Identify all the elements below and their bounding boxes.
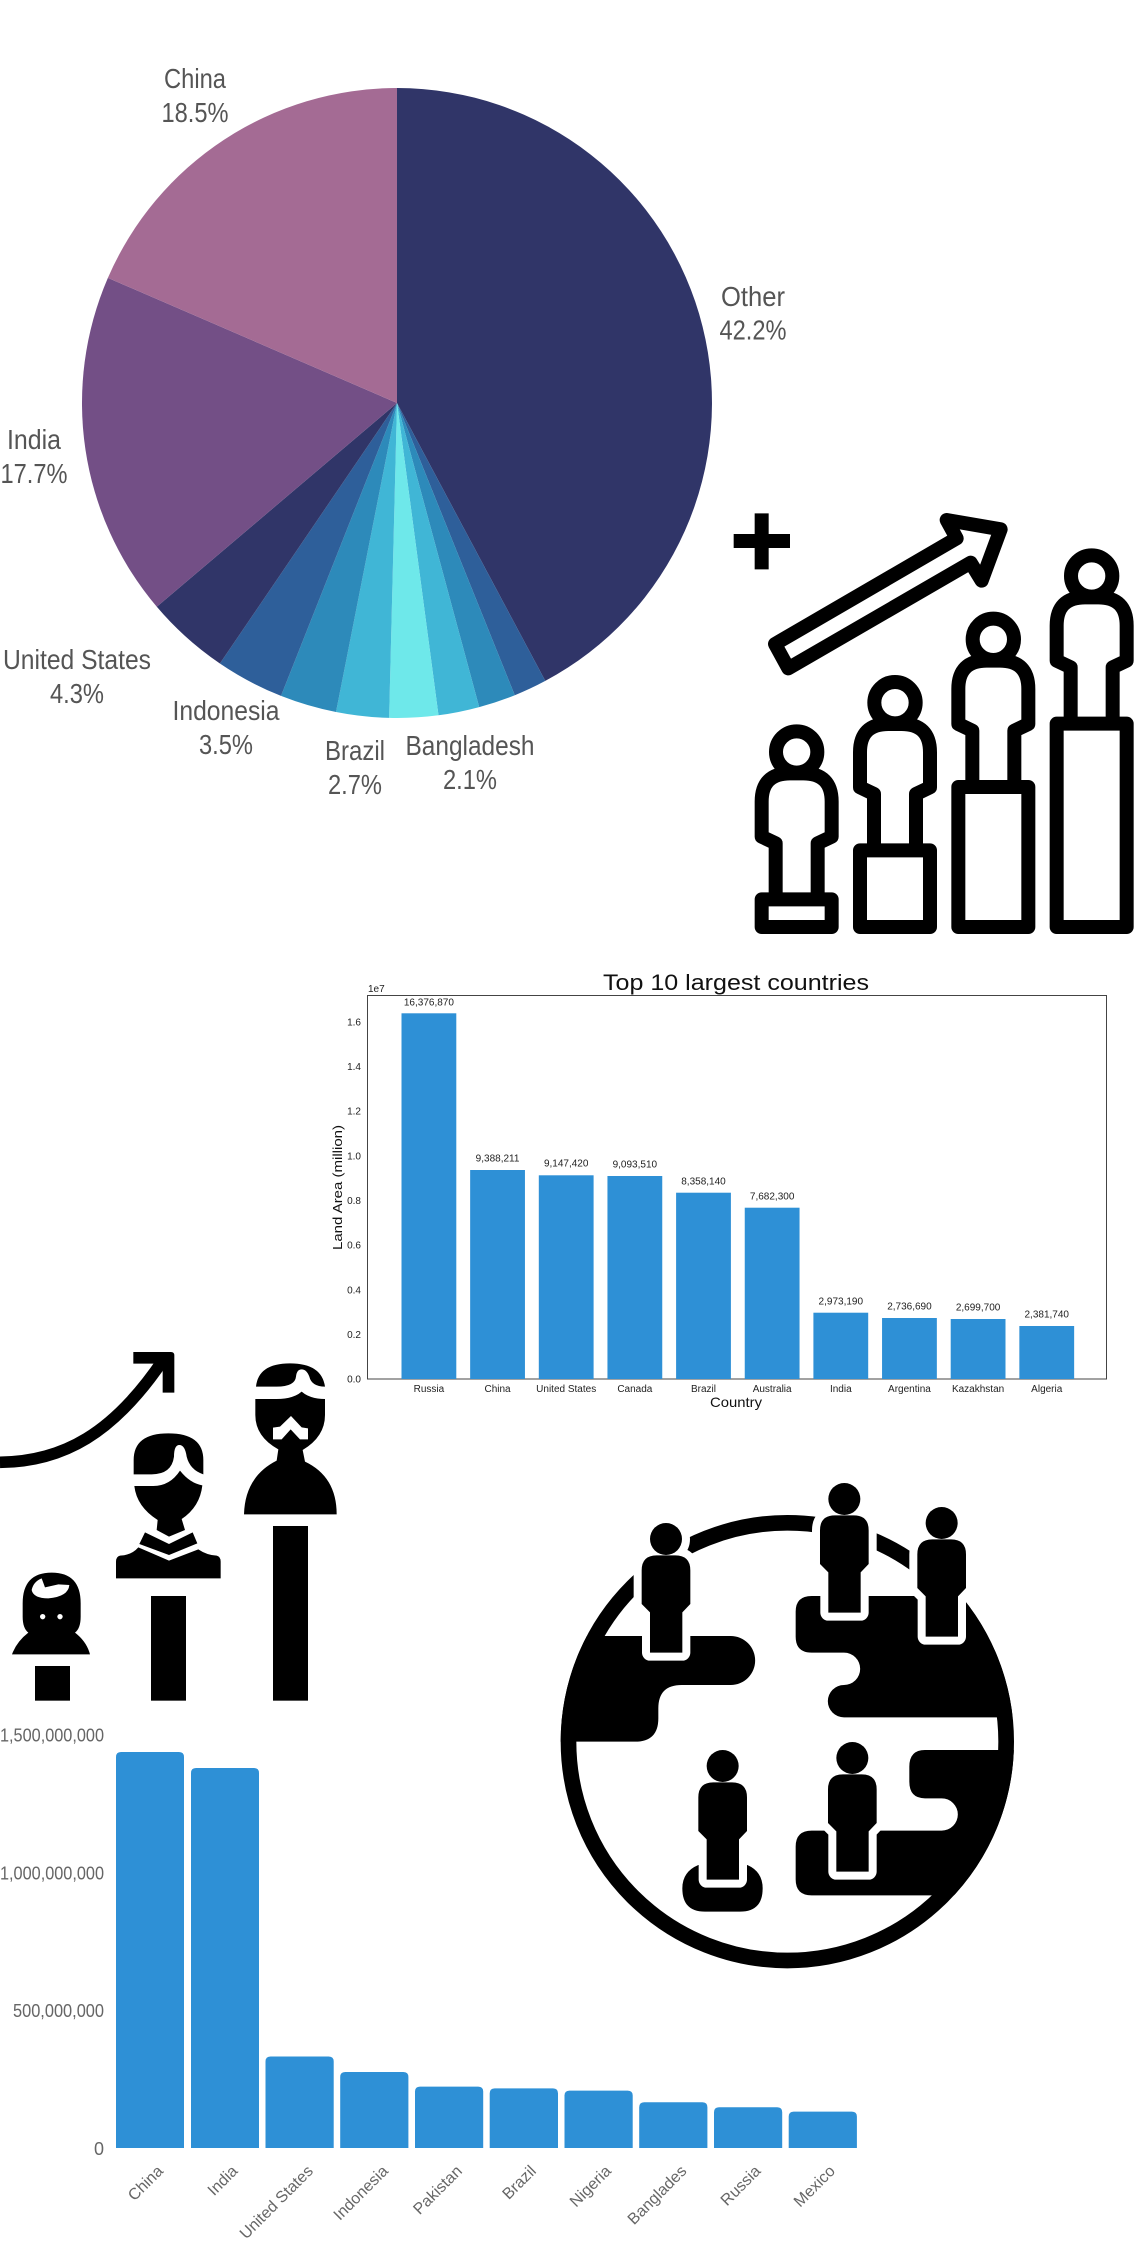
label: Brazil: 2.7% — [328, 769, 382, 800]
x axis tick labels: Brazil — [691, 1384, 716, 1395]
icon: adult figure — [244, 1363, 337, 1701]
icon: person upper left — [642, 1523, 690, 1653]
pie labels — [0, 63, 786, 800]
slice: Brazil 2.7% — [336, 403, 397, 718]
x axis tick labels: United States — [536, 1384, 596, 1395]
icon: person lower right — [828, 1742, 877, 1872]
icon: continents — [540, 1596, 1040, 1912]
icon: person top centre — [820, 1483, 869, 1613]
slice: unlabelled 2.9% — [281, 403, 397, 712]
y axis labels: 1,000,000,000 — [0, 1864, 104, 1884]
slice: Other 42.2% — [397, 88, 712, 681]
y axis labels: 500,000,000 — [13, 2001, 104, 2021]
x axis labels: Banglades — [625, 2163, 690, 2228]
x axis labels: China — [125, 2163, 167, 2204]
y axis tick labels: 1.6 — [347, 1017, 361, 1028]
x axis tick labels: Russia — [414, 1384, 445, 1395]
label: India: 17.7% — [0, 458, 68, 489]
x axis labels: Brazil — [500, 2163, 540, 2203]
axis scale note: 1e7 — [368, 984, 385, 995]
x axis tick labels: Canada — [617, 1384, 653, 1395]
y axis tick labels: 0.0 — [347, 1375, 361, 1386]
bar value labels: 7,682,300 — [750, 1191, 795, 1202]
x axis labels: India — [205, 2163, 241, 2199]
bars — [402, 1013, 1074, 1379]
label: Other: 42.2% — [720, 314, 786, 346]
y axis tick labels: 1.4 — [347, 1062, 361, 1073]
label: United States: 4.3% — [50, 678, 104, 709]
x axis tick labels: Algeria — [1031, 1384, 1063, 1395]
label: Brazil — [325, 735, 385, 800]
label: China: China — [164, 63, 226, 94]
icon: person on mid column — [958, 619, 1028, 927]
icon: rising arrow — [775, 520, 1001, 668]
y axis tick labels: 0.6 — [347, 1241, 361, 1252]
icon: young adult figure — [116, 1433, 221, 1701]
y axis tick labels: 1.0 — [347, 1151, 361, 1162]
x axis labels: Nigeria — [567, 2163, 615, 2211]
label: United States — [3, 644, 151, 709]
x axis labels: Mexico — [791, 2163, 839, 2211]
plot frame — [368, 996, 1106, 1379]
x axis tick labels: India — [830, 1384, 852, 1395]
icon: person on low column — [860, 682, 930, 927]
bar value labels: 9,147,420 — [544, 1159, 589, 1170]
icon: solid people growing from child to adult with curved arrow — [0, 1352, 337, 1701]
icon: person on short base — [762, 731, 832, 927]
icon: globe with standing people — [540, 1483, 1040, 1960]
y axis labels: 1,500,000,000 — [0, 1726, 104, 1746]
y axis labels — [0, 1726, 104, 2159]
icon: child figure — [12, 1573, 90, 1701]
x axis labels: Russia — [718, 2163, 765, 2209]
x axis tick labels: Australia — [753, 1384, 792, 1395]
x axis tick labels: Kazakhstan — [952, 1384, 1004, 1395]
bar value labels: 8,358,140 — [681, 1176, 726, 1187]
label: Bangladesh — [406, 730, 534, 795]
slice: China 18.5% — [108, 88, 397, 403]
label: India: India — [7, 424, 61, 455]
x axis labels — [125, 2163, 839, 2243]
label: Indonesia: Indonesia — [172, 695, 280, 726]
label: Bangladesh: Bangladesh — [406, 730, 534, 761]
x axis labels: Pakistan — [410, 2163, 466, 2218]
icon: person on tall column — [1057, 555, 1127, 927]
icon: person top right — [917, 1507, 966, 1637]
slice: United States 4.3% — [157, 403, 397, 664]
label: Other — [720, 281, 786, 346]
y axis tick labels: 1.2 — [347, 1107, 361, 1118]
icon: curved growth arrow — [0, 1352, 174, 1462]
pie chart: population share by country — [82, 88, 712, 718]
bar value labels: 16,376,870 — [404, 997, 454, 1008]
x axis title: Country — [710, 1394, 762, 1410]
label: Indonesia — [172, 695, 280, 760]
x axis tick labels: China — [484, 1384, 511, 1395]
icon: globe ring — [568, 1523, 1006, 1960]
label: Other: Other — [721, 281, 785, 312]
x axis labels: United States — [237, 2163, 317, 2243]
bar value labels: 9,388,211 — [476, 1153, 520, 1164]
slice: Bangladesh 2.1% — [397, 403, 515, 707]
bar value labels: 9,093,510 — [613, 1159, 658, 1170]
label: China — [162, 63, 228, 128]
bar value labels: 2,973,190 — [819, 1296, 863, 1307]
label: India — [0, 424, 68, 489]
slice: unlabelled 2.1% — [397, 403, 479, 715]
icon: person lower left — [698, 1750, 747, 1880]
x axis tick labels: Argentina — [888, 1384, 931, 1395]
icon: plus sign — [734, 513, 790, 569]
label: Indonesia: 3.5% — [199, 729, 253, 760]
x axis tick labels — [414, 1384, 1063, 1395]
bar chart: top 10 largest countries — [330, 970, 1106, 1410]
slice: unlabelled 1.7% — [397, 403, 545, 695]
y axis labels: 0 — [94, 2139, 104, 2159]
bar value labels — [404, 997, 1069, 1320]
y axis tick labels — [347, 1017, 361, 1386]
bar value labels: 2,381,740 — [1024, 1309, 1069, 1320]
y axis tick labels: 0.2 — [347, 1330, 361, 1341]
slice: unlabelled 2.5% — [389, 403, 438, 718]
y axis title: Land Area (million) — [330, 1125, 345, 1250]
label: Bangladesh: 2.1% — [443, 764, 497, 795]
y axis tick labels: 0.4 — [347, 1285, 361, 1296]
bar chart: most populous countries — [0, 1726, 857, 2243]
bar value labels: 2,699,700 — [956, 1302, 1001, 1313]
slice: Indonesia 3.5% — [220, 403, 397, 696]
label: Brazil: Brazil — [325, 735, 385, 766]
label: China: 18.5% — [162, 97, 228, 128]
bar value labels: 2,736,690 — [887, 1301, 932, 1312]
bars — [116, 1752, 857, 2148]
chart title: Top 10 largest countries — [603, 970, 869, 995]
label: United States: United States — [3, 644, 151, 675]
y axis tick labels: 0.8 — [347, 1196, 361, 1207]
slice: India 17.7% — [82, 278, 397, 607]
x axis labels: Indonesia — [331, 2163, 392, 2224]
icon: outlined people growing on columns with arrow — [734, 513, 1127, 927]
